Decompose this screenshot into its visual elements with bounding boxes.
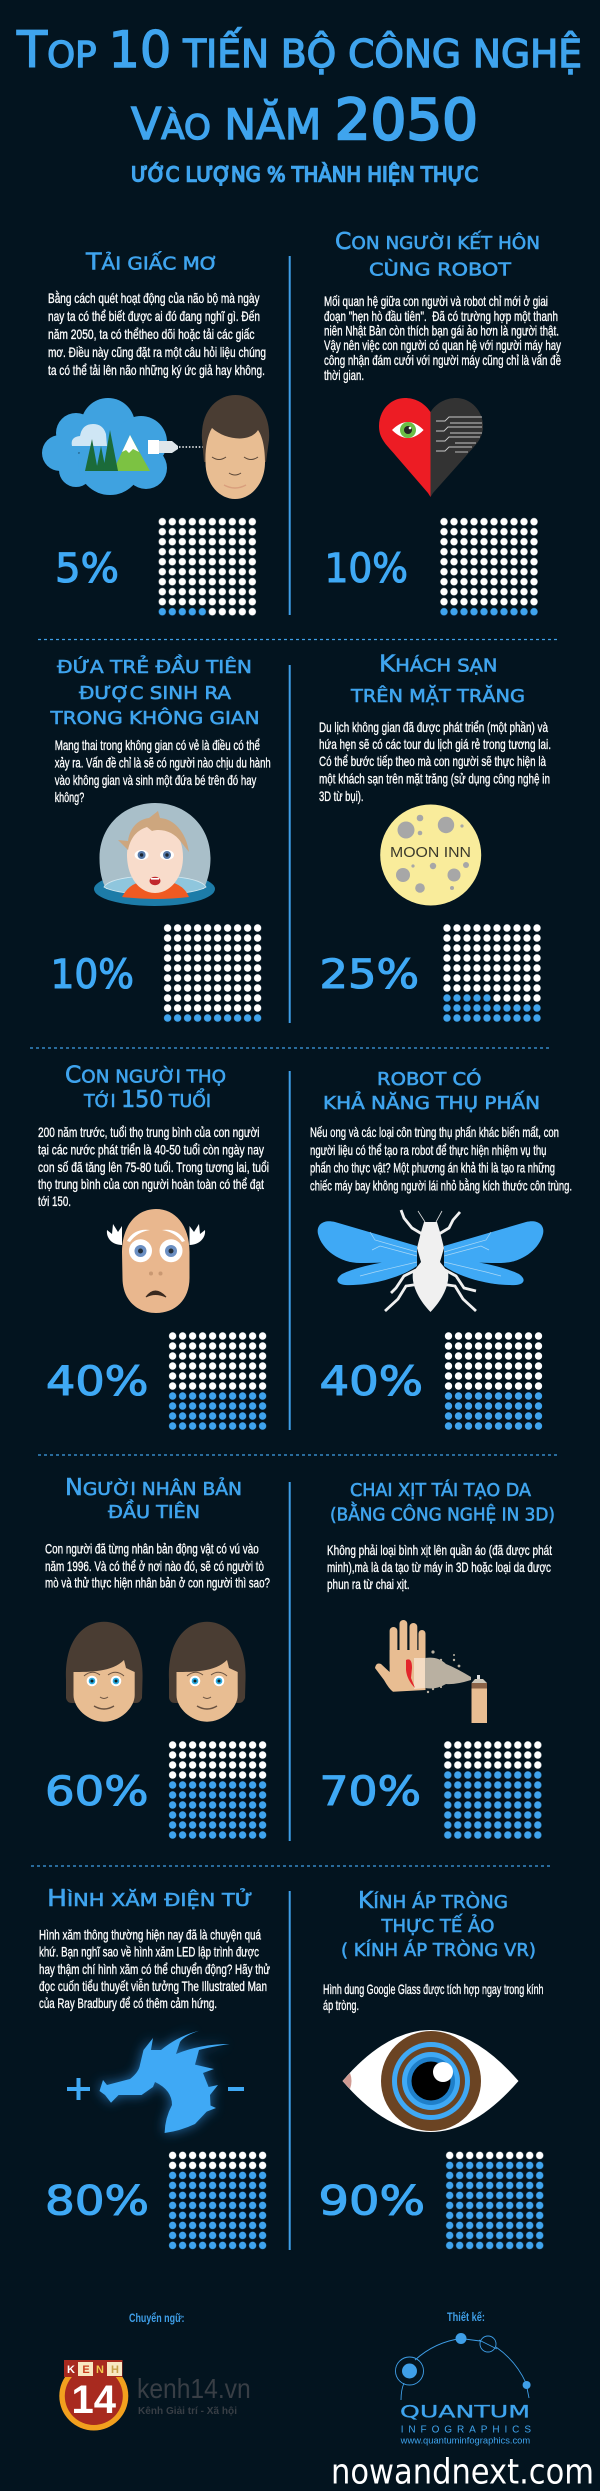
dot grid 70 percent [443,1740,543,1840]
icon: space baby [94,803,215,906]
dot grid 5 percent [157,517,257,617]
body text [48,290,266,378]
panel: chai xịt tái tạo da [320,1479,555,1840]
body text [324,293,561,383]
icon: eye with contact lens [342,2030,518,2132]
heading: ROBOT CÓ [377,1068,482,1090]
heading [341,1888,536,1961]
heading: ĐƯỢC SINH RA [79,683,232,704]
heading: TỚI 150 TUỔI [83,1087,211,1113]
icon: robot bee [318,1210,543,1312]
heading: ( KÍNH ÁP TRÒNG VR) [341,1939,536,1961]
heading: HÌNH XĂM ĐIỆN TỬ [47,1886,253,1912]
heading [65,1063,226,1113]
body text: mò và thử thực hiện nhân bản ở con người thì sao? [45,1574,270,1590]
heading: NGƯỜI NHÂN BẢN [65,1475,242,1501]
icon: old man head [107,1209,205,1313]
icon: dream cloud [42,398,167,495]
panel: đứa trẻ đầu tiên [49,654,271,1023]
panel: hình xăm điện tử [39,1886,270,2250]
panel: người nhân bản đầu tiên [45,1475,270,1840]
body text: thời gian. [324,367,364,383]
body text: nay ta có thể biết được ai đó đang nghĩ gì. Đến [48,308,260,324]
dot grid 40 percent [444,1331,544,1431]
heading: ĐẦU TIÊN [108,1499,200,1523]
body text: năm 1996. Và có thể ở nơi nào đó, sẽ có người tò [45,1558,264,1574]
heading: (BẰNG CÔNG NGHỆ IN 3D) [330,1502,555,1526]
body text: ta có thể tải lên não những ký ức giả hay không. [48,362,265,378]
heading [330,1479,555,1526]
title: VÀO NĂM 2050 [131,88,478,153]
heading: TRONG KHÔNG GIAN [49,707,259,729]
body text: vào không gian và sinh một đứa bé trên đó hay [55,772,256,788]
percent: 40% [46,1359,148,1405]
body text [323,1981,544,2013]
icon: sleeping head [202,395,269,499]
percent: 10% [324,546,408,592]
heading [65,1475,242,1523]
panel: robot thụ phấn [310,1068,572,1431]
percent: 90% [318,2179,425,2225]
body text [319,719,551,804]
dot grid 10 percent [163,923,263,1023]
heading: TRÊN MẶT TRĂNG [350,685,525,707]
body text: 3D từ bụi). [319,788,364,804]
body text: 200 năm trước, tuổi thọ trung bình của con người [38,1124,260,1140]
heading: KHÁCH SẠN [379,652,498,678]
heading: CON NGƯỜI THỌ [65,1063,226,1089]
panel: con người kết hôn cùng robot [324,229,561,617]
body text: hay thậm chí hình xăm có thể chuyển động? Hãy thử [39,1961,270,1977]
heading: TẢI GIẤC MƠ [85,250,218,276]
dot grid 40 percent [168,1331,268,1431]
logo: quantum infographics: INFOGRAPHICS [401,2425,531,2436]
logo: kenh14: H [111,2364,119,2376]
body text: khứ. Bạn nghĩ sao về hình xăm LED lập trình được [39,1944,259,1960]
logo: kenh14: kenh14.vn [137,2373,251,2404]
logo: kenh14: N [96,2364,104,2376]
body text [39,1926,270,2011]
percent: 5% [55,546,119,592]
body text: mơ. Điều này cũng đặt ra một câu hỏi liệu chúng [48,344,266,360]
heading [323,1068,540,1114]
body text [310,1124,572,1194]
body text [38,1124,269,1209]
body text: Hình xăm thông thường hiện nay đã là chuyện quá [39,1926,261,1942]
title [16,21,582,153]
icon: moon inn: MOON INN [390,844,471,861]
logo: kenh14: E [82,2364,90,2376]
credit: translator [59,2311,251,2430]
heading [335,229,540,280]
body text [327,1542,552,1592]
logo: quantum infographics [396,2333,531,2446]
icon: glowing dragon tattoo [67,2031,244,2133]
icon: usb plug [148,440,203,454]
dot grid 90 percent [445,2150,545,2250]
icon: half robot heart [379,398,483,497]
percent: 60% [45,1769,148,1815]
logo: quantum infographics: QUANTUM [400,2402,530,2422]
logo: kenh14: K [67,2364,75,2376]
heading: CON NGƯỜI KẾT HÔN [335,229,540,255]
icon: hand with spray can [375,1620,487,1723]
heading: THỰC TẾ ẢO [380,1913,494,1937]
percent: 40% [320,1359,423,1405]
label: Chuyển ngữ: [129,2311,184,2325]
dot grid 80 percent [168,2150,268,2250]
logo: kenh14 [59,2360,251,2430]
body text: Bằng cách quét hoạt động của não bộ mà ngày [48,290,260,306]
panel: khách sạn trên mặt trăng [319,652,551,1023]
heading: KÍNH ÁP TRÒNG [358,1888,508,1914]
subtitle: ƯỚC LƯỢNG % THÀNH HIỆN THỰC [131,162,478,186]
percent: 10% [50,952,134,998]
body text: xảy ra. Vấn đề chỉ là sẽ có người nào chịu du hành [55,754,271,770]
logo: quantum infographics: www.quantuminfographics.com [400,2436,530,2446]
body text: con số đã tăng lên 75-80 tuổi. Trong tương lai, tuổi [38,1159,269,1175]
heading: ĐỨA TRẺ ĐẦU TIÊN [57,654,252,678]
dot grid 10 percent [439,517,539,617]
body text: Con người đã từng nhân bản động vật có vú vào [45,1540,259,1556]
body text: tới 150. [38,1193,71,1209]
percent: 80% [45,2179,149,2225]
heading: CÙNG ROBOT [369,258,512,280]
dot grid 25 percent [442,923,542,1023]
icon: moon inn [380,804,481,906]
heading: KHẢ NĂNG THỤ PHẤN [323,1090,540,1114]
panel: con người thọ tới 150 tuổi [38,1063,269,1431]
body text: Mang thai trong không gian có vẻ là điều có thể [55,737,260,753]
body text: năm 2050, ta có thểtheo dõi hoặc tải các giấc [48,326,254,342]
body text: thọ trung bình của con người hoàn toàn có thể đạt [38,1176,264,1192]
title: TOP 10 TIẾN BỘ CÔNG NGHỆ [16,21,582,79]
dot grid 60 percent [168,1740,268,1840]
body text [55,737,271,805]
logo: kenh14: Kênh Giải trí - Xã hội [138,2405,237,2417]
heading [49,654,259,729]
percent: 25% [320,952,419,998]
body text: của Ray Bradbury để có thêm cảm hứng. [39,1995,217,2011]
body text: tại các nước phát triển là 40-50 tuổi còn ngày nay [38,1142,264,1158]
body text: phun ra từ chai xịt. [327,1576,410,1592]
heading: CHAI XỊT TÁI TẠO DA [350,1479,532,1501]
percent: 70% [320,1769,421,1815]
panel: kính áp tròng thực tế ảo [318,1888,545,2250]
body text: đọc cuốn tiểu thuyết viễn tưởng The Illustrated Man [39,1978,267,1994]
body text: áp tròng. [323,1997,359,2013]
body text [45,1540,270,1590]
panel: tải giấc mơ [42,250,269,617]
body text: không? [55,789,84,805]
label: Thiết kế: [447,2310,485,2324]
credit: designer [396,2310,531,2446]
logo: kenh14: 14 [72,2378,117,2422]
icon: clone faces [66,1622,246,1722]
heading [350,652,525,707]
